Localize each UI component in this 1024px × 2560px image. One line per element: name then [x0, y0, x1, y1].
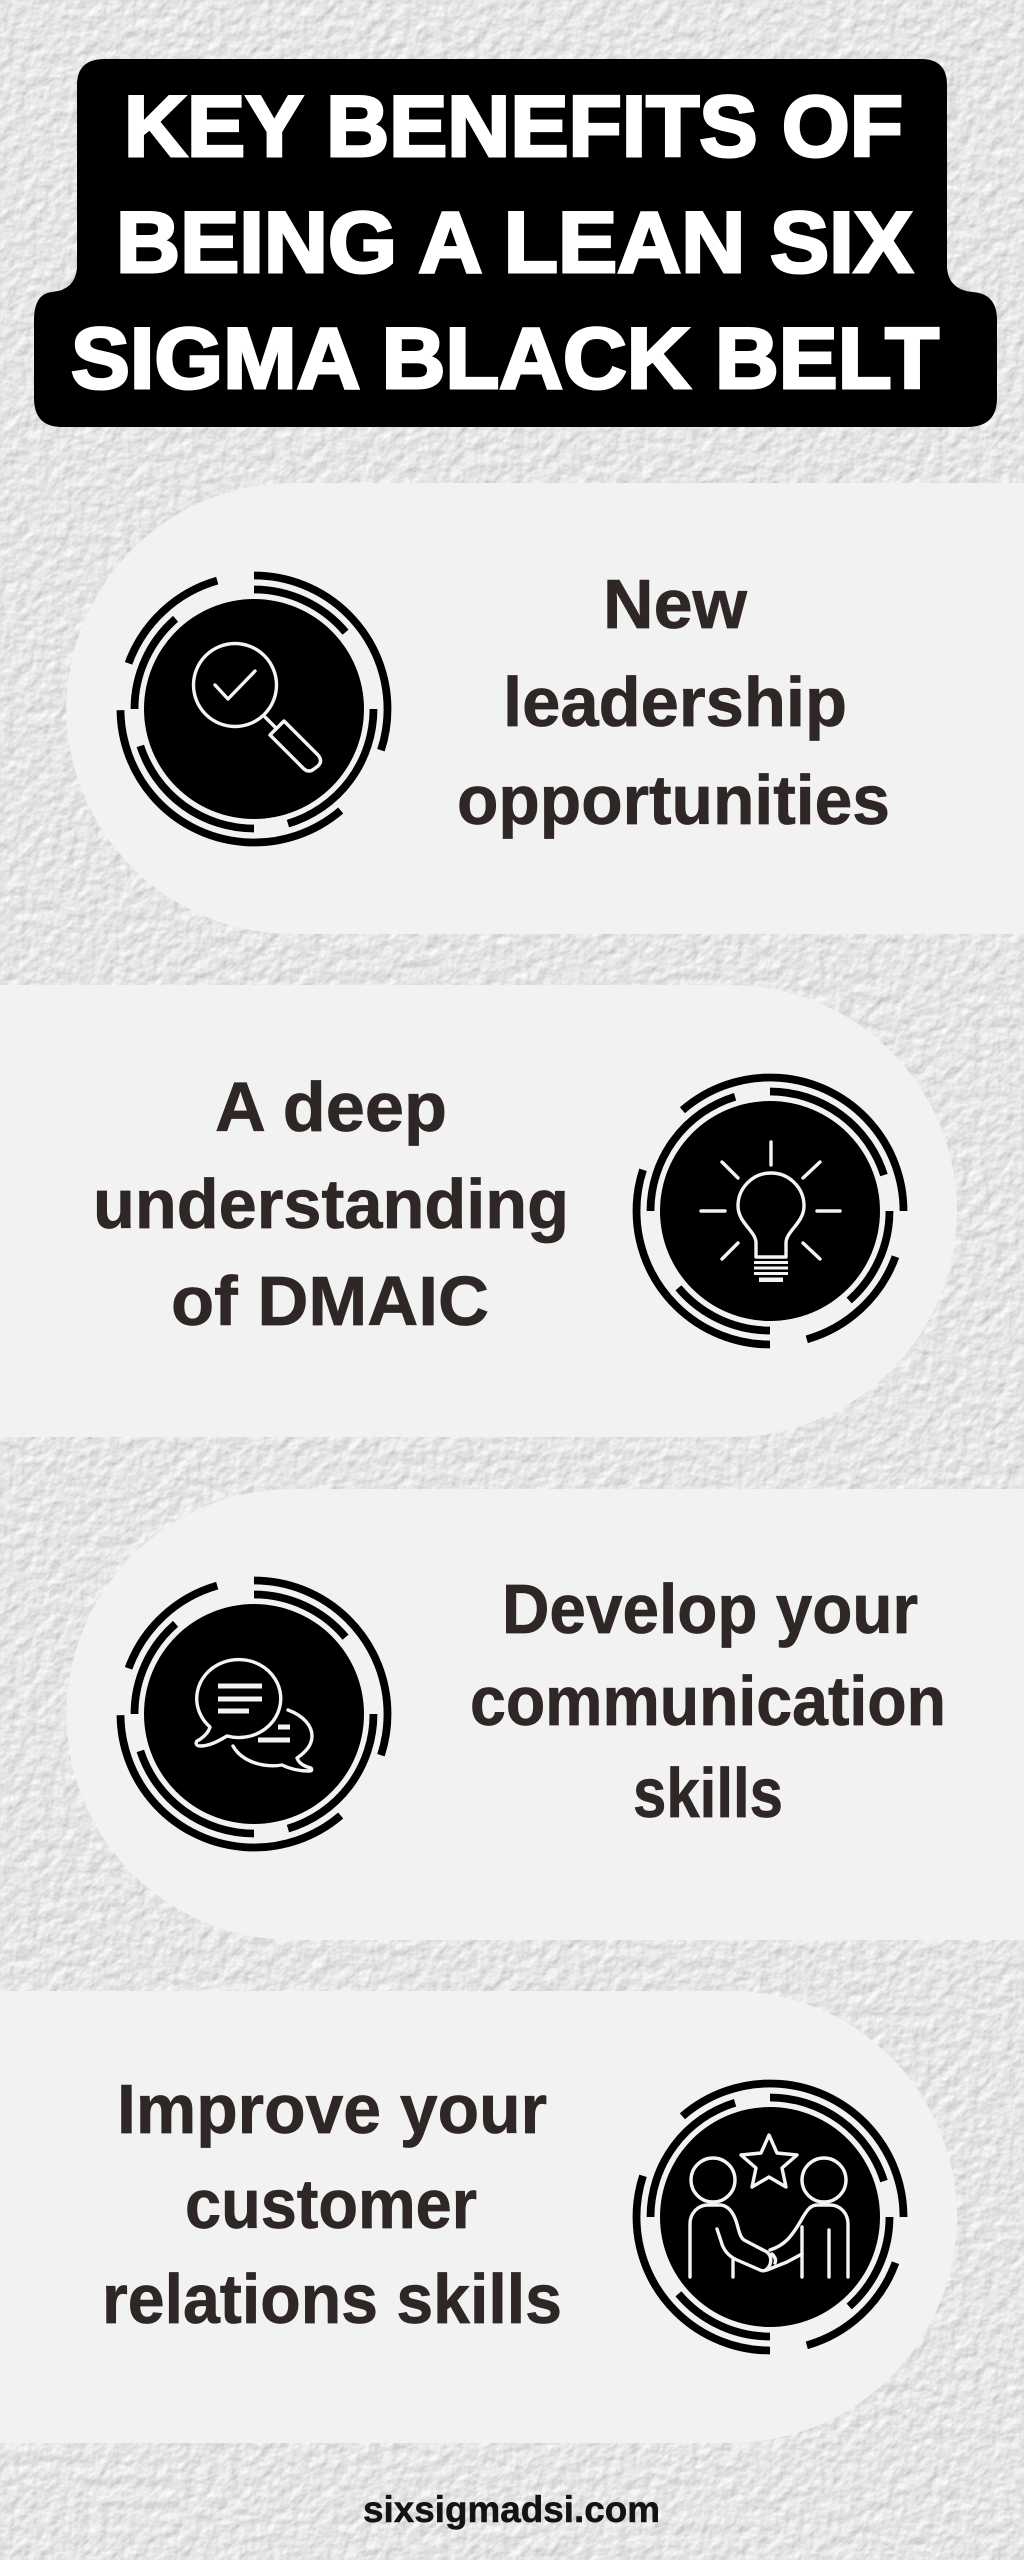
- benefit text: opportunities: [457, 761, 890, 839]
- panel background: [66, 1489, 1024, 1940]
- panel: develop your communication skills: [66, 1489, 1024, 1940]
- panel background: [0, 1991, 957, 2443]
- panel: a deep understanding of DMAIC: [0, 985, 958, 1437]
- benefit text: New: [603, 565, 748, 643]
- benefit text: [102, 2070, 562, 2338]
- icon: light bulb: [582, 1023, 958, 1399]
- footer website: sixsigmadsi.com: [363, 2489, 660, 2530]
- benefit text: A deep: [215, 1068, 447, 1146]
- panel background: [66, 483, 1024, 934]
- panel: new leadership opportunities: [66, 483, 1024, 934]
- benefit text: Develop your: [502, 1570, 918, 1648]
- title background shape: [34, 59, 997, 427]
- title banner: [34, 59, 997, 427]
- icon: magnifying glass with check mark: [66, 521, 442, 897]
- benefit text: [470, 1570, 946, 1832]
- benefit text: skills: [633, 1754, 783, 1832]
- benefit text: leadership: [503, 663, 847, 741]
- title text: SIGMA BLACK BELT: [71, 311, 939, 407]
- benefit text: Improve your: [117, 2070, 547, 2148]
- benefit text: communication: [470, 1662, 946, 1740]
- icon: speech bubbles: [66, 1526, 442, 1902]
- panel background: [0, 985, 957, 1437]
- benefit text: of DMAIC: [171, 1262, 489, 1340]
- benefit text: understanding: [93, 1165, 569, 1243]
- panel: improve your customer relations skills: [0, 1991, 958, 2443]
- title text: BEING A LEAN SIX: [116, 195, 913, 291]
- benefit text: [93, 1068, 569, 1340]
- benefit text: relations skills: [102, 2260, 562, 2338]
- benefit text: customer: [185, 2165, 477, 2243]
- icon: handshake with star: [582, 2029, 958, 2405]
- benefit text: [457, 565, 890, 839]
- title text: KEY BENEFITS OF: [124, 79, 903, 175]
- title text: [71, 79, 939, 407]
